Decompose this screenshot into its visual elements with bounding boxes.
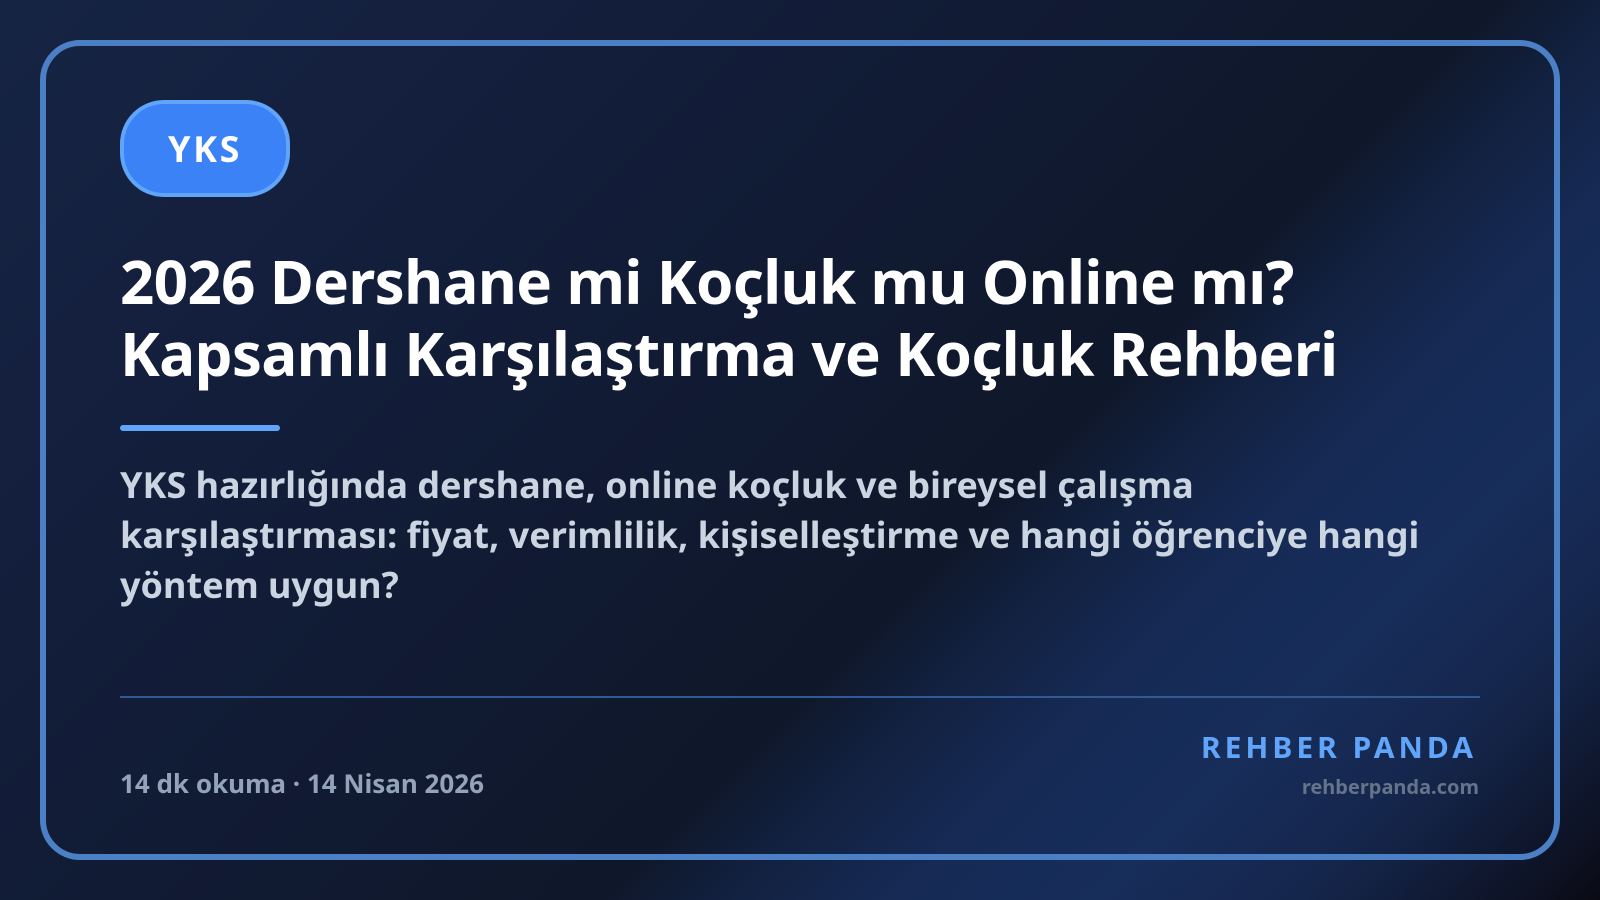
footer divider (120, 696, 1480, 698)
description text (120, 460, 1419, 609)
brand name: REHBER PANDA (1201, 726, 1477, 767)
title: Kapsamlı Karşılaştırma ve Koçluk Rehberi (120, 312, 1337, 394)
badge: YKS (120, 100, 290, 197)
description text: YKS hazırlığında dershane, online koçluk ve bireysel çalışma (120, 460, 1194, 509)
accent bar (120, 425, 280, 431)
brand url: rehberpanda.com (1302, 773, 1479, 800)
badge: YKS: YKS (168, 124, 242, 173)
title (120, 240, 1337, 394)
title: 2026 Dershane mi Koçluk mu Online mı? (120, 240, 1294, 322)
meta: reading time and date: 14 dk okuma · 14 Nisan 2026 (120, 765, 484, 801)
description text: karşılaştırması: fiyat, verimlilik, kişiselleştirme ve hangi öğrenciye hangi (120, 510, 1419, 559)
description text: yöntem uygun? (120, 560, 399, 609)
